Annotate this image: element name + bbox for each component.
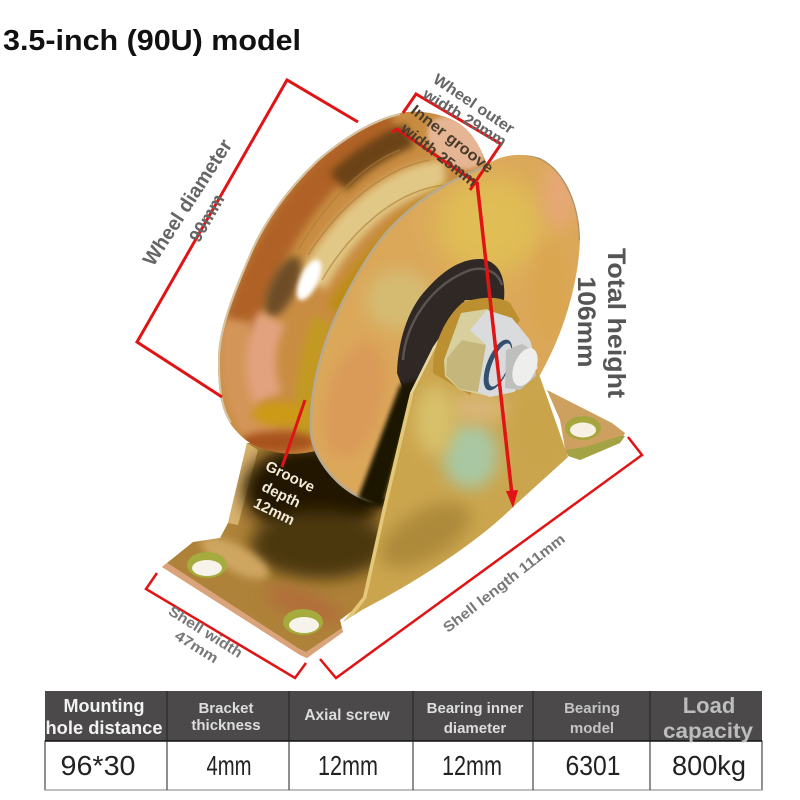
white highlight: [293, 257, 324, 304]
yellow and orange bottom: [252, 402, 308, 426]
column: bracket thickness: Bracket: [198, 700, 254, 717]
rear right mounting flange: [547, 390, 625, 460]
column: bracket thickness: 4mm: [206, 750, 252, 781]
dimension: groove depth: [251, 400, 317, 529]
column: bearing model: [564, 700, 620, 781]
column: axial screw: 12mm: [318, 750, 378, 781]
column: bearing inner diameter: [427, 700, 524, 781]
pink lower band: [261, 318, 272, 398]
column: mounting hole distance: hole distance: [46, 718, 162, 738]
front wheel flange: [310, 154, 580, 503]
specification table: [45, 691, 762, 790]
dimension: wheel diameter: Wheel diameter: [139, 135, 237, 270]
dimension: groove depth: 12mm: [251, 495, 297, 529]
dimension: inner groove width: Inner groove: [407, 102, 497, 177]
column: load capacity: capacity: [663, 720, 753, 743]
column: bearing inner diameter: Bearing inner: [427, 700, 524, 717]
column: bracket thickness: thickness: [191, 717, 261, 734]
column: bracket thickness: [191, 700, 261, 781]
dimension: total height arrow: Total height: [602, 248, 630, 399]
column: bearing inner diameter: 12mm: [442, 750, 502, 781]
bracket upright: [340, 295, 575, 625]
dimension: wheel outer width: Wheel outer: [430, 71, 517, 138]
dimension: groove depth: depth: [259, 478, 303, 512]
pale groove streak: [312, 175, 445, 282]
dimension: total height arrow: 106mm: [572, 277, 600, 367]
dimension: inner groove width: [392, 102, 497, 190]
base plate with left tab and mounting holes: [162, 442, 385, 658]
column: bearing model: model: [570, 720, 614, 737]
column: load capacity: 800kg: [672, 750, 746, 781]
table body: [45, 741, 762, 790]
dimension: wheel outer width: width 29mm: [419, 85, 509, 151]
column: axial screw: [304, 707, 391, 781]
axle nut and bolt: [433, 298, 543, 397]
dimension: total height arrow: [477, 182, 630, 508]
column: mounting hole distance: Mounting: [64, 696, 144, 716]
column: load capacity: [663, 693, 753, 781]
black bearing washer and shadow: [358, 259, 504, 507]
table header band: [45, 691, 762, 741]
column: bearing model: Bearing: [564, 700, 620, 717]
title: 3.5-inch (90U) model: [3, 25, 301, 57]
pale rim edge: [218, 113, 400, 423]
column: bearing inner diameter: diameter: [444, 720, 506, 737]
groove texture streaks: [298, 150, 445, 280]
column: bearing model: 6301: [566, 750, 620, 781]
dimension: wheel diameter: [137, 80, 358, 397]
gold inner groove: [336, 192, 455, 312]
dimension: wheel outer width: [403, 71, 517, 190]
product photo: V-groove wheel with bracket: [150, 105, 625, 670]
dimension: shell width: 47mm: [172, 628, 221, 667]
dark ridge patch: [260, 252, 306, 320]
dark upper groove: [338, 135, 410, 182]
dimension: shell width: Shell width: [165, 604, 245, 662]
peach rim bulge: [425, 115, 485, 172]
column: axial screw: Axial screw: [304, 707, 391, 724]
dimension: wheel diameter: 90mm: [185, 190, 228, 246]
wheel rear flange and groove drum: [210, 105, 495, 460]
dimension: inner groove width: width 25mm: [396, 120, 480, 190]
column: mounting hole distance: [46, 696, 162, 781]
dimension: groove depth: Groove: [263, 458, 317, 496]
dimension: shell length: Shell length 111mm: [441, 531, 569, 636]
column: mounting hole distance: 96*30: [60, 750, 136, 781]
dimension: shell width: [146, 573, 306, 678]
dimension: shell length: [320, 437, 642, 678]
outer rim band: [240, 125, 395, 330]
column: load capacity: Load: [683, 693, 735, 718]
